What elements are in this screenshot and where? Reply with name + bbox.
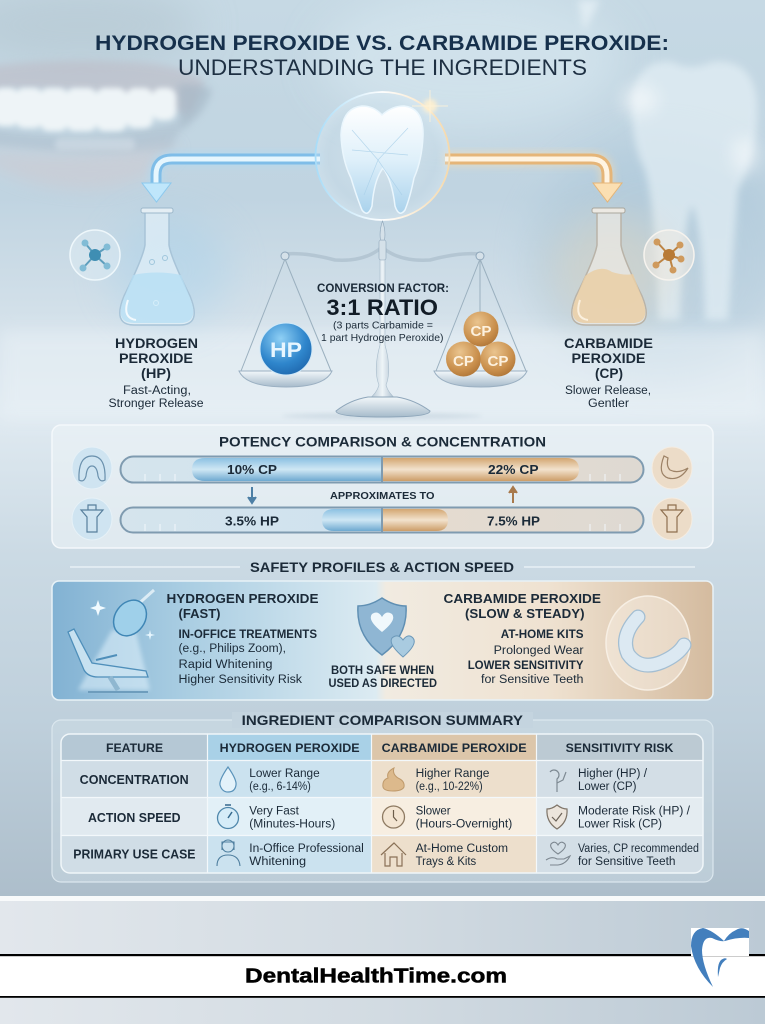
text: hydrogen peroxide fast: (e.g., Philips Zoom), [178, 643, 286, 655]
label: hydrogen peroxide [108, 336, 204, 410]
row: concentration: (e.g., 6-14%) [249, 781, 311, 793]
label: hydrogen peroxide: Fast-Acting, [123, 385, 191, 397]
label: approximates to: APPROXIMATES TO [330, 490, 434, 502]
text: carbamide peroxide slow and steady: CARBAMIDE PEROXIDE [444, 591, 601, 606]
flask: carbamide peroxide [572, 208, 646, 325]
row: primary use case: In-Office Professional [249, 843, 364, 855]
icon: three CP spheres: CP [453, 354, 474, 370]
label: carbamide peroxide: PEROXIDE [572, 351, 646, 366]
panel: safety profiles [52, 581, 713, 700]
table header: HYDROGEN PEROXIDE [220, 741, 360, 755]
text: carbamide peroxide slow and steady [444, 591, 601, 686]
heading: potency comparison: POTENCY COMPARISON & CONCENTRATION [219, 434, 546, 450]
text: both safe: USED AS DIRECTED [328, 678, 437, 690]
icon: shield with hearts [358, 598, 414, 657]
arrow: tooth to hydrogen peroxide [142, 159, 320, 202]
icon: HP sphere: HP [270, 339, 302, 362]
text: hydrogen peroxide fast [166, 591, 319, 686]
icon: three CP spheres [446, 312, 516, 376]
icon: dental chair and lamp [68, 590, 155, 692]
table header: SENSITIVITY RISK [566, 741, 674, 755]
title: UNDERSTANDING THE INGREDIENTS [178, 55, 587, 80]
title [95, 32, 669, 80]
title: HYDROGEN PEROXIDE VS. CARBAMIDE PEROXIDE: [95, 32, 669, 55]
row: action speed: (Hours-Overnight) [416, 818, 512, 830]
row: concentration: Lower Range [249, 768, 320, 780]
bar: HP equivalent [120, 508, 644, 532]
icon: HP sphere [260, 323, 312, 375]
arrow: up [509, 487, 517, 503]
conversion factor callout: 3:1 RATIO [326, 295, 438, 320]
icon: tan whitening pen [652, 498, 692, 540]
arrow: tooth to carbamide peroxide [445, 159, 622, 202]
row: primary use case: Varies, CP recommended [578, 843, 699, 855]
text: carbamide peroxide slow and steady: Prolonged Wear [494, 645, 584, 657]
row: primary use case: At-Home Custom [416, 843, 508, 855]
footer banner [0, 954, 765, 998]
row: action speed: Slower [416, 806, 451, 818]
text: hydrogen peroxide fast: IN-OFFICE TREATMENTS [178, 629, 317, 641]
text: carbamide peroxide slow and steady: AT-HOME KITS [501, 629, 584, 641]
text: carbamide peroxide slow and steady: for Sensitive Teeth [481, 674, 584, 686]
table header: CARBAMIDE PEROXIDE [382, 741, 527, 755]
conversion factor callout [317, 283, 449, 344]
label: hydrogen peroxide: Stronger Release [108, 398, 204, 410]
panel: potency comparison and concentration [52, 425, 713, 548]
icon: three CP spheres: CP [470, 324, 492, 340]
row: concentration: CONCENTRATION [80, 773, 189, 787]
bar: CP concentration: 10% CP [227, 463, 277, 477]
text: carbamide peroxide slow and steady: (SLOW & STEADY) [465, 606, 584, 621]
icon: three CP spheres: CP [488, 354, 509, 370]
row: action speed: ACTION SPEED [88, 811, 181, 825]
icon: molecule, carbamide peroxide [644, 230, 694, 280]
label: hydrogen peroxide: HYDROGEN [115, 336, 198, 351]
row: primary use case: for Sensitive Teeth [578, 856, 676, 868]
comparison table [61, 734, 703, 873]
label: hydrogen peroxide: PEROXIDE [119, 351, 193, 366]
text: hydrogen peroxide fast: (FAST) [178, 606, 220, 621]
bar: HP equivalent: 7.5% HP [487, 514, 540, 528]
icon: molecule, hydrogen peroxide [70, 230, 120, 280]
icon: aligner in bubble [606, 596, 690, 690]
heading: ingredient comparison summary: INGREDIENT COMPARISON SUMMARY [242, 712, 524, 728]
row: primary use case: Whitening [249, 856, 306, 868]
row: concentration: Higher Range [416, 768, 489, 780]
label: carbamide peroxide: CARBAMIDE [564, 336, 653, 351]
row: primary use case: PRIMARY USE CASE [73, 848, 196, 862]
logo: blue tooth [691, 928, 749, 987]
label: carbamide peroxide [564, 336, 653, 410]
footer banner: DentalHealthTime.com [245, 966, 507, 988]
text: hydrogen peroxide fast: Higher Sensitivity Risk [178, 674, 302, 686]
balance scale [239, 221, 527, 419]
row: action speed [88, 805, 691, 830]
panel: ingredient comparison summary [52, 712, 713, 882]
label: carbamide peroxide: Slower Release, [565, 385, 651, 397]
conversion factor callout: (3 parts Carbamide = [333, 320, 433, 332]
conversion factor callout: CONVERSION FACTOR: [317, 283, 449, 295]
text: both safe [328, 665, 437, 690]
icon: blue whitening pen [72, 498, 112, 540]
bar: HP equivalent: 3.5% HP [225, 514, 279, 528]
text: hydrogen peroxide fast: HYDROGEN PEROXIDE [166, 591, 319, 606]
table header: FEATURE [106, 741, 163, 755]
row: concentration [80, 767, 648, 793]
icon: central glowing tooth [316, 90, 450, 220]
row: action speed: Lower Risk (CP) [578, 818, 662, 830]
text: both safe: BOTH SAFE WHEN [331, 665, 434, 677]
label: carbamide peroxide: (CP) [595, 366, 623, 381]
flask: hydrogen peroxide [120, 208, 194, 325]
icon: tan tray [652, 447, 692, 489]
table header [106, 741, 674, 755]
heading: safety profiles and action speed: SAFETY PROFILES & ACTION SPEED [250, 559, 514, 575]
row: concentration: (e.g., 10-22%) [416, 781, 483, 793]
label: hydrogen peroxide: (HP) [141, 366, 171, 381]
row: concentration: Lower (CP) [578, 781, 637, 793]
bar: CP concentration [120, 456, 644, 482]
row: action speed: (Minutes-Hours) [249, 818, 335, 830]
arrow: down [248, 487, 256, 503]
row: primary use case [73, 840, 699, 868]
conversion factor callout: 1 part Hydrogen Peroxide) [321, 332, 444, 344]
row: primary use case: Trays & Kits [416, 856, 476, 868]
text: carbamide peroxide slow and steady: LOWER SENSITIVITY [468, 660, 584, 672]
label: carbamide peroxide: Gentler [588, 398, 629, 410]
bar: CP concentration: 22% CP [488, 463, 538, 477]
row: action speed: Very Fast [249, 806, 300, 818]
icon: blue tray [72, 447, 112, 489]
text: hydrogen peroxide fast: Rapid Whitening [178, 659, 272, 671]
row: concentration: Higher (HP) / [578, 768, 648, 780]
row: action speed: Moderate Risk (HP) / [578, 806, 691, 818]
footer background [0, 896, 765, 1024]
